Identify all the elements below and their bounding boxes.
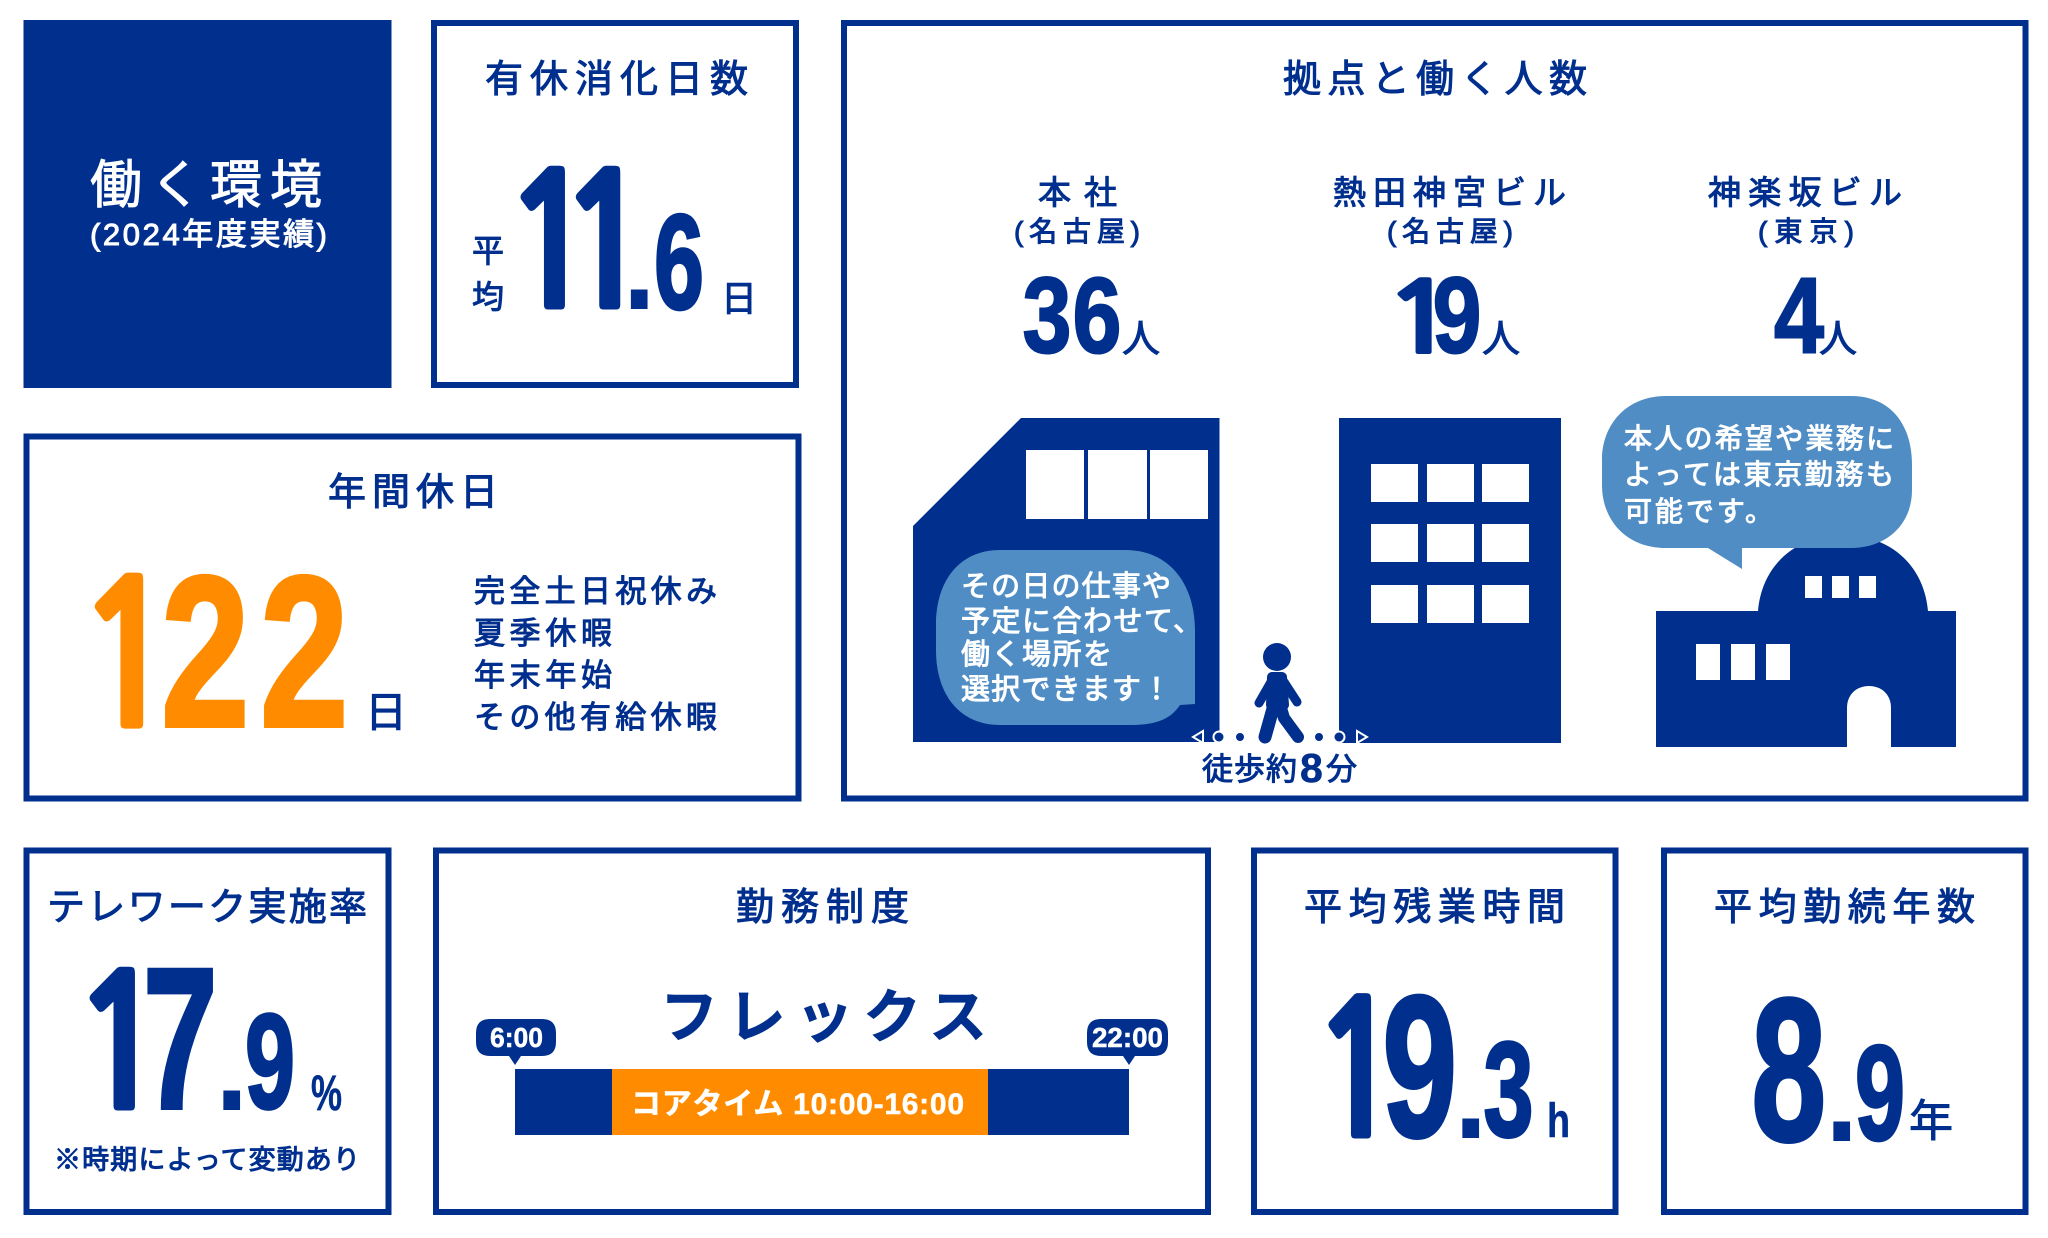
location: head office: 3 (1022, 254, 1072, 376)
number: 19.3 hours: 1 (1310, 980, 1405, 1164)
building: Kagurazaka (1656, 535, 1956, 747)
number: 11.6 days: . (626, 208, 653, 332)
number: 11.6 days: 6 (654, 186, 704, 338)
location: Kagurazaka building: (東京) (1758, 216, 1854, 247)
number: 11.6 days: 日 (721, 278, 757, 319)
heading: paid leave: 有休消化日数 (485, 59, 748, 101)
timeline bar (515, 1069, 1129, 1135)
speech bubble: flexible location: 予定に合わせて、 (961, 605, 1202, 638)
panel: locations (844, 23, 2026, 798)
number: 8.9 years (1752, 957, 1953, 1184)
number: 11.6 days (501, 153, 757, 338)
number: 8.9 years: 9 (1855, 1018, 1905, 1168)
heading: annual holidays: 年間休日 (328, 472, 498, 514)
walking route dots and arrows (1193, 731, 1367, 743)
number: 8.9 years: 8 (1752, 957, 1826, 1184)
number: 122 days (74, 531, 407, 772)
tag: 22:00 (1087, 1019, 1168, 1065)
location: head office: 6 (1072, 254, 1122, 376)
label: average: 均 (472, 279, 504, 315)
number: 8.9 years: . (1828, 1040, 1856, 1164)
tag: 22:00: 22:00 (1092, 1022, 1163, 1053)
label: average (472, 233, 504, 315)
location: head office (1014, 174, 1160, 376)
heading: average tenure: 平均勤続年数 (1714, 887, 1975, 929)
speech bubble: Tokyo work: よっては東京勤務も (1624, 459, 1894, 490)
panel: average overtime (1254, 850, 1616, 1212)
panel: work system (436, 850, 1208, 1212)
number: 19.3 hours: 9 (1382, 954, 1457, 1179)
holiday list: 夏季休暇 (474, 616, 612, 651)
speech bubble: flexible location (936, 550, 1202, 725)
location: Atsuta Jingu building: 9 (1432, 254, 1482, 376)
heading: locations: 拠点と働く人数 (1283, 59, 1587, 101)
heading: average overtime: 平均残業時間 (1304, 887, 1565, 929)
location: head office: 本社 (1038, 174, 1117, 211)
number: 17.9 percent: 1 (70, 954, 171, 1136)
label: 8 minutes on foot: 8 (1300, 745, 1323, 791)
speech bubble: Tokyo work (1602, 396, 1912, 569)
panel: title (24, 20, 392, 388)
tag: 6:00 (476, 1019, 556, 1065)
location: Kagurazaka building: 人 (1819, 319, 1857, 361)
location: Atsuta Jingu building: (名古屋) (1387, 216, 1513, 247)
speech bubble: Tokyo work: 本人の希望や業務に (1624, 423, 1894, 454)
text: flex: フレックス (660, 985, 987, 1050)
location: Kagurazaka building: 4 (1774, 254, 1824, 376)
location: head office: (名古屋) (1014, 216, 1140, 247)
icon: walking person (1259, 643, 1298, 737)
heading: telework rate: テレワーク実施率 (47, 887, 367, 929)
number: 19.3 hours: . (1457, 1038, 1484, 1160)
heading: work system: 勤務制度 (736, 887, 909, 929)
number: 8.9 years: 年 (1909, 1097, 1953, 1146)
label: 8 minutes on foot: 分 (1326, 752, 1357, 787)
speech bubble: flexible location: その日の仕事や (961, 570, 1171, 603)
holiday list: その他有給休暇 (474, 700, 717, 735)
holiday list (474, 574, 717, 735)
number: 17.9 percent: 7 (143, 926, 218, 1151)
number: 17.9 percent: . (218, 1010, 246, 1132)
tag: 6:00: 6:00 (490, 1022, 543, 1053)
label: 8 minutes on foot (1202, 745, 1357, 791)
location: Atsuta Jingu building: 1 (1382, 270, 1459, 368)
label: average: 平 (472, 233, 504, 269)
location: Kagurazaka building: 神楽坂ビル (1708, 174, 1902, 211)
number: 19.3 hours: 3 (1484, 1014, 1534, 1165)
number: 11.6 days: 1 (557, 153, 656, 335)
speech bubble: flexible location: 選択できます！ (961, 673, 1171, 706)
number: 11.6 days: 1 (501, 153, 600, 335)
number: 17.9 percent: % (311, 1065, 342, 1121)
number: 19.3 hours (1310, 954, 1570, 1179)
number: 19.3 hours: h (1547, 1095, 1570, 1148)
panel: telework rate (26, 850, 388, 1212)
building: Atsuta Jingu (1339, 418, 1561, 743)
number: 122 days: 1 (74, 558, 182, 756)
speech bubble: flexible location: 働く場所を (961, 638, 1112, 671)
location: Atsuta Jingu building (1333, 174, 1566, 376)
number: 17.9 percent (70, 926, 342, 1151)
location: Atsuta Jingu building: 熱田神宮ビル (1333, 174, 1566, 211)
timeline bar: コアタイム 10:00-16:00 (631, 1088, 964, 1121)
speech bubble: Tokyo work: 可能です。 (1624, 496, 1773, 527)
subheading: 2024年度実績: (2024年度実績) (90, 217, 327, 252)
location: Atsuta Jingu building: 人 (1482, 319, 1520, 361)
number: 122 days: 2 (161, 531, 250, 772)
note: ※時期によって変動あり (54, 1145, 360, 1175)
panel: paid leave (434, 23, 796, 385)
holiday list: 完全土日祝休み (474, 574, 717, 609)
heading: 働く環境: 働く環境 (90, 157, 322, 215)
label: 8 minutes on foot: 徒歩約 (1202, 752, 1297, 787)
number: 122 days: 2 (260, 531, 348, 772)
holiday list: 年末年始 (474, 658, 612, 693)
location: head office: 人 (1122, 319, 1160, 361)
building: head office (913, 418, 1220, 742)
location: Kagurazaka building (1708, 174, 1902, 376)
number: 17.9 percent: 9 (245, 986, 295, 1137)
number: 122 days: 日 (365, 689, 407, 736)
panel: average tenure (1664, 850, 2026, 1212)
panel: annual holidays (26, 436, 798, 798)
